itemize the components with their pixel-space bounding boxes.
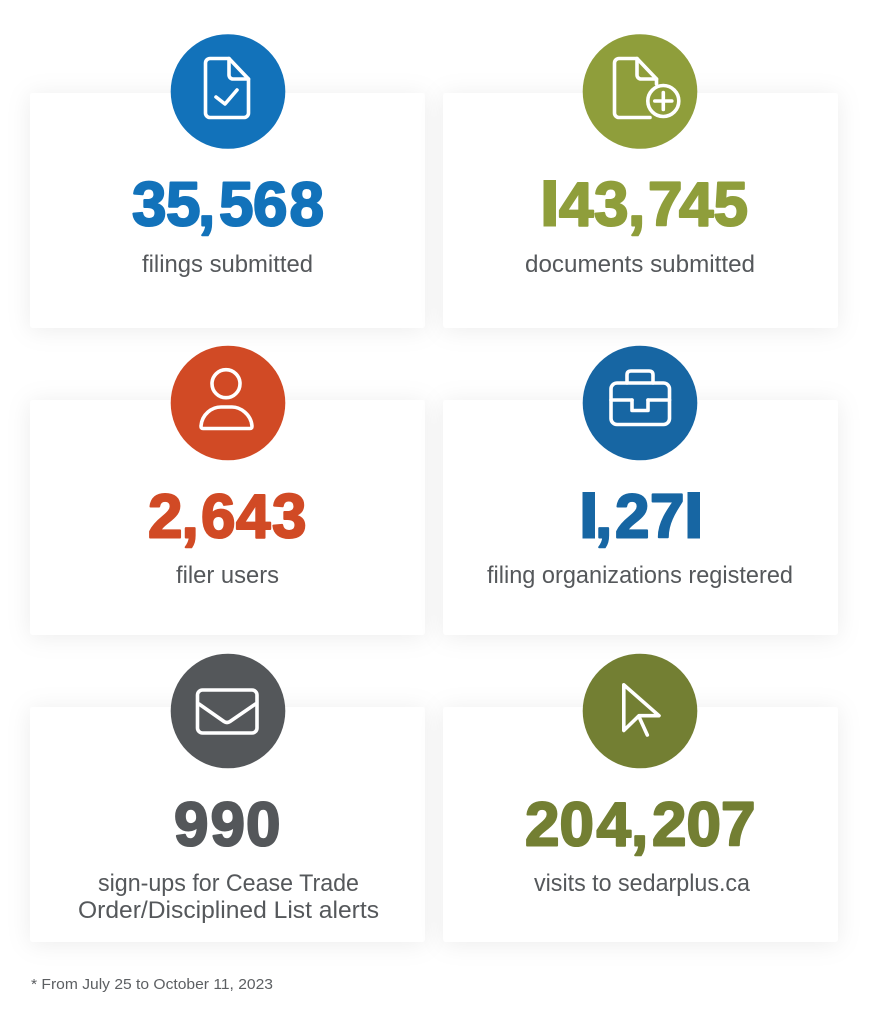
panel: filer users <box>30 346 425 635</box>
icon circle: blue <box>171 34 285 149</box>
card background <box>443 400 838 635</box>
number: 990 <box>174 790 280 860</box>
label: visits to sedarplus.ca <box>534 870 751 897</box>
label: sign-ups for Cease Trade <box>98 870 359 897</box>
panel: filings submitted <box>30 34 425 328</box>
card background <box>30 400 425 635</box>
label: Order/Disciplined List alerts <box>78 897 379 924</box>
card background <box>30 93 425 328</box>
card background <box>30 707 425 942</box>
number: 2,643 <box>148 482 306 552</box>
footnote: * From July 25 to October 11, 2023 <box>31 976 273 993</box>
panel: filing organizations registered <box>443 346 838 635</box>
number: 204,207 <box>525 790 755 860</box>
icon: document with plus <box>614 58 679 118</box>
icon circle: olive <box>583 654 697 768</box>
number: 35,568 <box>132 170 324 240</box>
number: ,27 <box>595 482 684 552</box>
label: filer users <box>176 562 279 589</box>
icon: document with check <box>206 58 248 118</box>
icon: envelope <box>198 690 257 733</box>
panel: alert sign-ups <box>30 654 425 942</box>
number: 43,745 <box>559 170 748 240</box>
card background <box>443 707 838 942</box>
label: filing organizations registered <box>487 562 793 589</box>
label: filings submitted <box>142 251 313 278</box>
number: 1 <box>543 170 556 240</box>
label: documents submitted <box>525 251 755 278</box>
icon: cursor <box>624 685 659 735</box>
card background <box>443 93 838 328</box>
number: 1 <box>582 482 595 552</box>
icon circle: dark blue <box>583 346 697 460</box>
panel: site visits <box>443 654 838 942</box>
icon circle: grey <box>171 654 285 768</box>
panel: documents submitted <box>443 34 838 328</box>
icon: person <box>201 370 252 428</box>
icon circle: green <box>583 34 697 149</box>
panel: filing organizations registered: 1 <box>687 482 700 552</box>
icon: briefcase <box>611 371 670 424</box>
icon circle: red <box>171 346 285 460</box>
